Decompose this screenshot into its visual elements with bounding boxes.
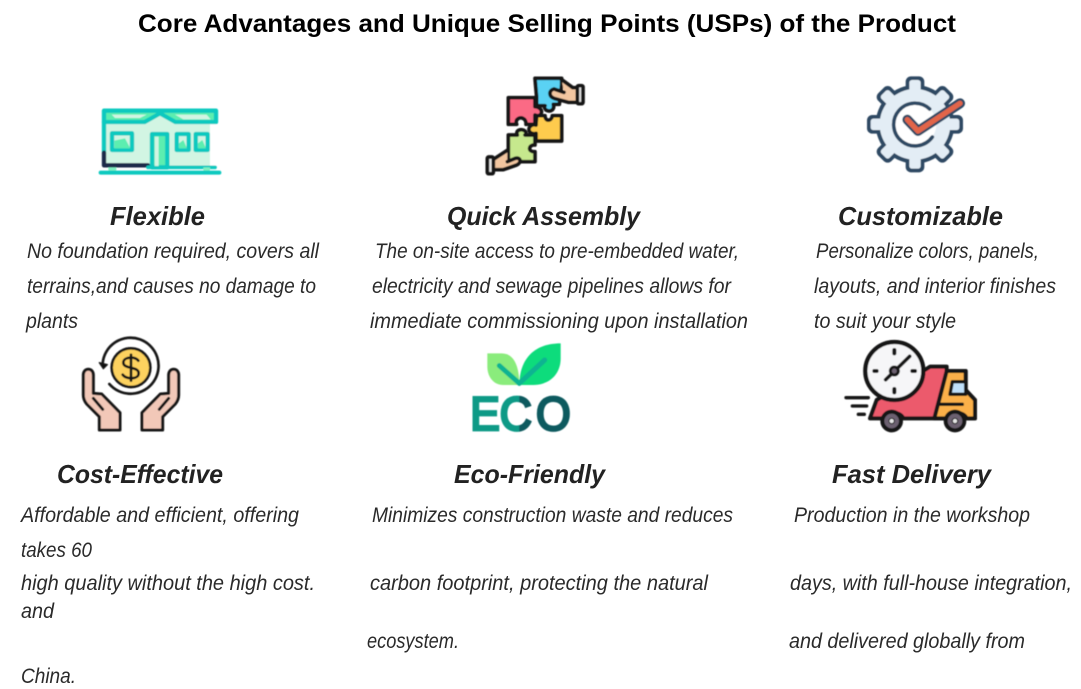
icon: hands with coin (83, 338, 179, 430)
text: quick assembly description (370, 240, 748, 333)
text: quick assembly description: electricity and sewage pipelines allows for (372, 275, 732, 298)
text: customizable description: to suit your style (814, 310, 956, 333)
heading: quick assembly: Quick Assembly (447, 201, 641, 231)
title: Core Advantages and Unique Selling Points (USPs) of the Product (138, 10, 957, 38)
icon: house (101, 111, 219, 173)
panel: quick assembly (370, 78, 748, 333)
text: quick assembly description: immediate commissioning upon installation (370, 310, 748, 333)
text: eco-friendly description: ecosystem. (367, 630, 459, 653)
icon: gear with check (869, 78, 961, 170)
icon: eco leaves: ECO (470, 388, 571, 440)
icon: delivery truck with clock (846, 342, 975, 430)
text: cost-effective description: and (21, 600, 55, 623)
panel: customizable (814, 78, 1056, 333)
heading: customizable: Customizable (838, 201, 1003, 231)
text: customizable description: layouts, and interior finishes (814, 275, 1056, 298)
text: flexible description: plants (25, 310, 78, 333)
text: flexible description: terrains,and causes no damage to (27, 275, 316, 298)
text: customizable description: Personalize colors, panels, (816, 240, 1039, 263)
text: eco-friendly description: Minimizes construction waste and reduces (372, 504, 733, 527)
heading: cost-effective: Cost-Effective (57, 459, 223, 489)
text: fast delivery description: and delivered globally from (789, 630, 1025, 653)
text: cost-effective description: takes 60 (21, 539, 92, 562)
icon: puzzle hands (487, 78, 583, 174)
text: eco-friendly description (367, 504, 733, 653)
text: eco-friendly description: carbon footprint, protecting the natural (370, 572, 709, 595)
heading: fast delivery: Fast Delivery (832, 459, 993, 489)
text: fast delivery description: Production in the workshop (794, 504, 1030, 527)
text: cost-effective description: Affordable and efficient, offering (19, 504, 299, 527)
text: cost-effective description: high quality without the high cost. (21, 572, 315, 595)
text: customizable description (814, 240, 1056, 333)
text: flexible description: No foundation required, covers all (27, 240, 320, 263)
text: flexible description (25, 240, 320, 333)
text: cost-effective description: China. (21, 665, 76, 688)
heading: flexible: Flexible (110, 201, 205, 231)
panel: fast delivery (789, 342, 1072, 653)
text: cost-effective description (19, 504, 315, 688)
panel: eco-friendly (367, 343, 733, 653)
heading: eco-friendly: Eco-Friendly (454, 459, 606, 489)
icon: eco leaves (470, 343, 571, 440)
panel: flexible (25, 111, 320, 333)
text: fast delivery description (789, 504, 1072, 653)
panel: cost-effective (19, 338, 315, 688)
text: quick assembly description: The on-site access to pre-embedded water, (375, 240, 739, 263)
